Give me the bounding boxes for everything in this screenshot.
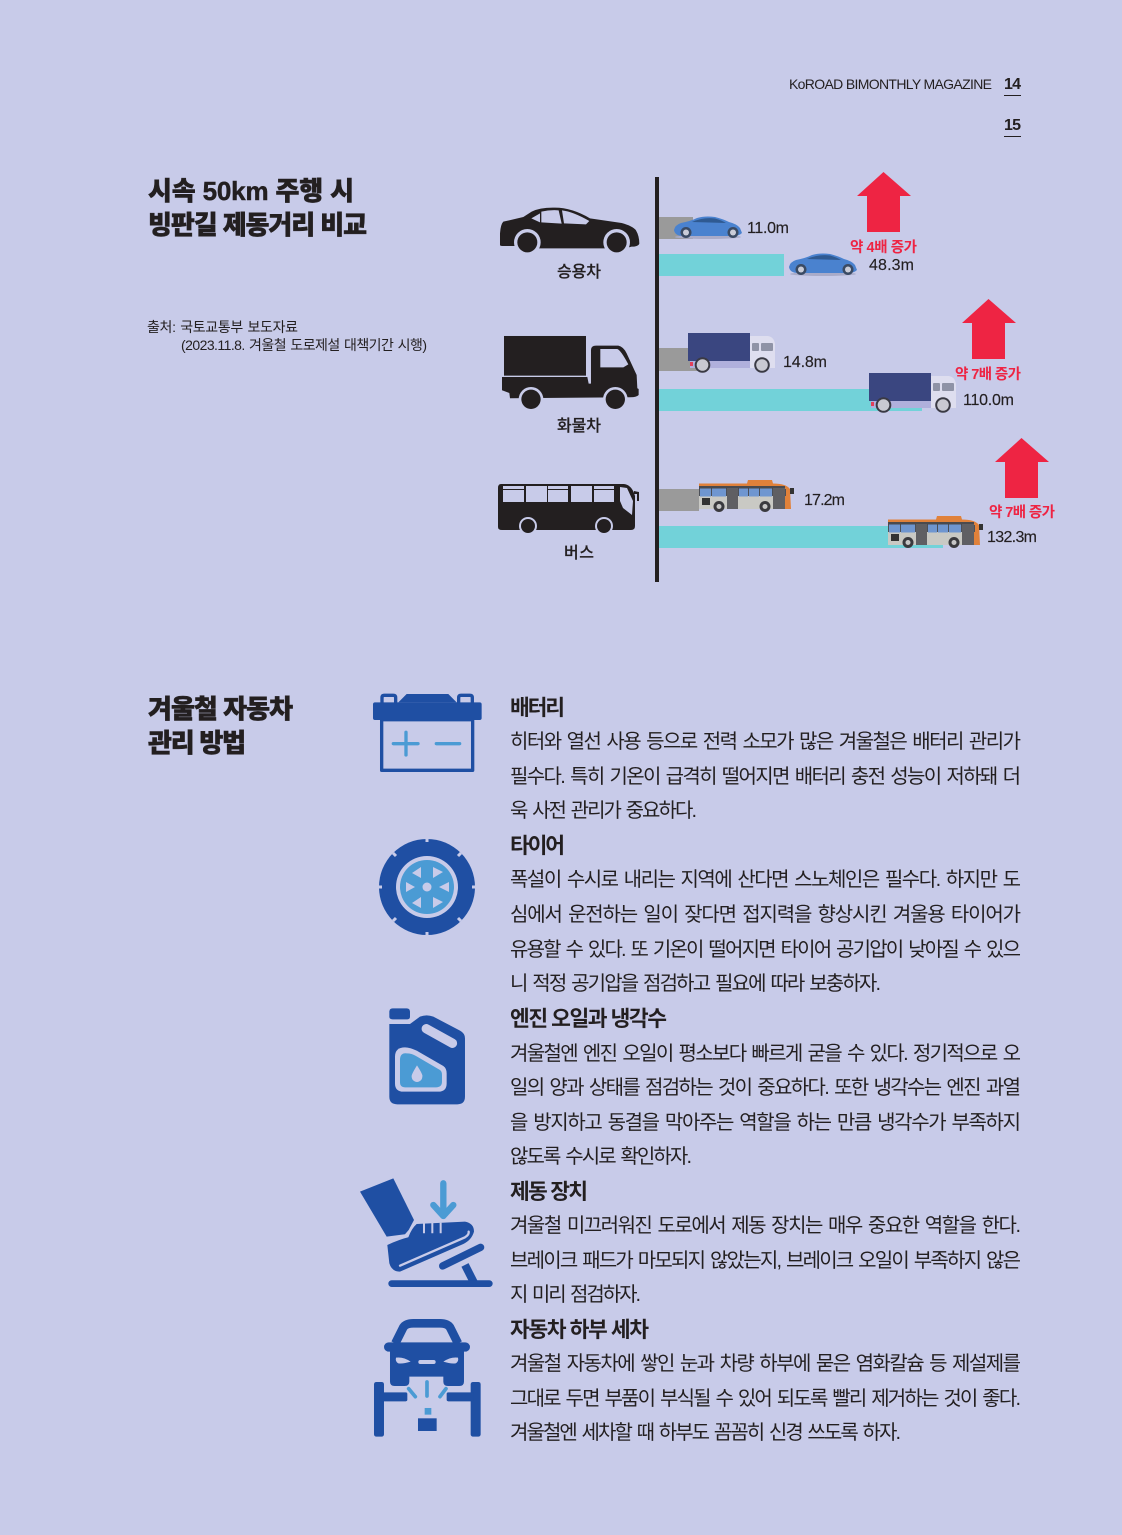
- chart axis: [655, 177, 659, 582]
- row: passenger car: [500, 172, 917, 281]
- text block: tire: 폭설이 수시로 내리는 지역에 산다면 스노체인은 필수다. 하지만 도: [510, 868, 1021, 891]
- icon: blue car: [674, 216, 742, 239]
- text block: battery: 필수다. 특히 기온이 급격히 떨어지면 배터리 충전 성능이 저하돼 더: [510, 765, 1021, 788]
- icy road bar: [659, 254, 784, 276]
- text block: engine oil and coolant: 을 방지하고 동결을 막아주는 역할을 하는 만큼 냉각수가 부족하지: [510, 1111, 1021, 1134]
- text block: tire: 유용할 수 있다. 또 기온이 떨어지면 타이어 공기압이 낮아질 수 있으: [510, 938, 1021, 961]
- icy road bar: [659, 526, 943, 548]
- value: 132.3m: [987, 529, 1037, 546]
- icon: bus silhouette: [498, 484, 639, 535]
- increase label: 약 7배 증가: [955, 366, 1021, 383]
- icon: bus: [888, 516, 983, 548]
- source note: [147, 319, 427, 353]
- text block: brakes: 브레이크 패드가 마모되지 않았는지, 브레이크 오일이 부족하지 않은: [510, 1249, 1021, 1272]
- magazine header: 14: [1004, 76, 1021, 93]
- value: 110.0m: [963, 392, 1014, 409]
- increase label: 약 4배 증가: [850, 239, 917, 256]
- heading: braking distance comparison: 빙판길 제동거리 비교: [148, 210, 367, 240]
- text block: underbody wash: 그대로 두면 부품이 부식될 수 있어 되도록 빨리 제거하는 것이 좋다.: [510, 1387, 1021, 1410]
- text block: brakes: [510, 1180, 1021, 1306]
- value: 17.2m: [804, 492, 845, 509]
- label: 화물차: [557, 417, 601, 435]
- arrow: [857, 172, 911, 232]
- text block: engine oil and coolant: 겨울철엔 엔진 오일이 평소보다 빠르게 굳을 수 있다. 정기적으로 오: [510, 1042, 1021, 1065]
- braking distance chart: [498, 172, 1055, 582]
- heading: winter car care: [148, 694, 293, 758]
- row: bus: [498, 438, 1055, 562]
- text block: battery: [510, 696, 1021, 822]
- magazine header: KoROAD BIMONTHLY MAGAZINE: [789, 76, 992, 92]
- heading: winter car care: 겨울철 자동차: [148, 694, 293, 724]
- text block: underbody wash: 겨울철 자동차에 쌓인 눈과 차량 하부에 묻은 염화칼슘 등 제설제를: [510, 1352, 1021, 1375]
- icon: blue car: [789, 253, 857, 276]
- row: truck: [502, 299, 1021, 435]
- text block: brakes: 겨울철 미끄러워진 도로에서 제동 장치는 매우 중요한 역할을 한다.: [510, 1214, 1021, 1237]
- text block: tire: 심에서 운전하는 일이 잦다면 접지력을 향상시킨 겨울용 타이어가: [510, 903, 1021, 926]
- text block: battery: 히터와 열선 사용 등으로 전력 소모가 많은 겨울철은 배터리 관리가: [510, 730, 1021, 753]
- icon: car silhouette: [500, 208, 639, 256]
- increase label: 약 7배 증가: [989, 504, 1055, 521]
- text block: engine oil and coolant: 엔진 오일과 냉각수: [510, 1007, 667, 1031]
- label: 버스: [564, 544, 594, 562]
- text block: battery: 배터리: [510, 696, 565, 720]
- icon: tire: [378, 838, 476, 936]
- magazine header: [789, 76, 1021, 137]
- text block: tire: [510, 834, 1021, 995]
- icon: car underbody wash: [374, 1323, 481, 1437]
- dry road bar: [659, 489, 699, 511]
- icy road bar: [659, 389, 922, 411]
- label: 승용차: [557, 263, 601, 281]
- source note: (2023.11.8. 겨울철 도로제설 대책기간 시행): [181, 337, 427, 353]
- icon: truck: [688, 333, 775, 373]
- arrow: [962, 299, 1016, 359]
- text block: tire: 타이어: [510, 834, 565, 858]
- magazine header: 15: [1004, 117, 1021, 134]
- value: 14.8m: [783, 354, 827, 371]
- icon: oil jug: [389, 1008, 465, 1104]
- icon: bus: [699, 480, 794, 512]
- value: 11.0m: [747, 220, 789, 237]
- dry road bar: [659, 348, 699, 371]
- text block: underbody wash: 자동차 하부 세차: [510, 1318, 649, 1342]
- text block: brakes: 지 미리 점검하자.: [510, 1283, 641, 1306]
- dry road bar: [659, 217, 693, 239]
- arrow: [995, 438, 1049, 498]
- heading: braking distance comparison: [148, 176, 367, 240]
- text block: battery: 욱 사전 관리가 중요하다.: [510, 799, 697, 822]
- text block: underbody wash: 겨울철엔 세차할 때 하부도 꼼꼼히 신경 쓰도록 하자.: [510, 1421, 901, 1444]
- icon: brake pedal: [360, 1178, 489, 1284]
- icon: battery: [373, 694, 482, 770]
- text block: engine oil and coolant: 일의 양과 상태를 점검하는 것이 중요하다. 또한 냉각수는 엔진 과열: [510, 1076, 1021, 1099]
- source note: 출처: 국토교통부 보도자료: [147, 319, 298, 335]
- text block: engine oil and coolant: [510, 1007, 1021, 1168]
- value: 48.3m: [869, 257, 914, 274]
- icon: truck: [869, 373, 956, 413]
- text block: tire: 니 적정 공기압을 점검하고 필요에 따라 보충하자.: [510, 972, 881, 995]
- icon: truck silhouette: [502, 336, 639, 412]
- text block: engine oil and coolant: 않도록 수시로 확인하자.: [510, 1145, 692, 1168]
- heading: winter car care: 관리 방법: [148, 728, 246, 758]
- heading: braking distance comparison: 시속 50km 주행 시: [148, 176, 354, 206]
- text block: underbody wash: [510, 1318, 1021, 1444]
- text block: brakes: 제동 장치: [510, 1180, 588, 1204]
